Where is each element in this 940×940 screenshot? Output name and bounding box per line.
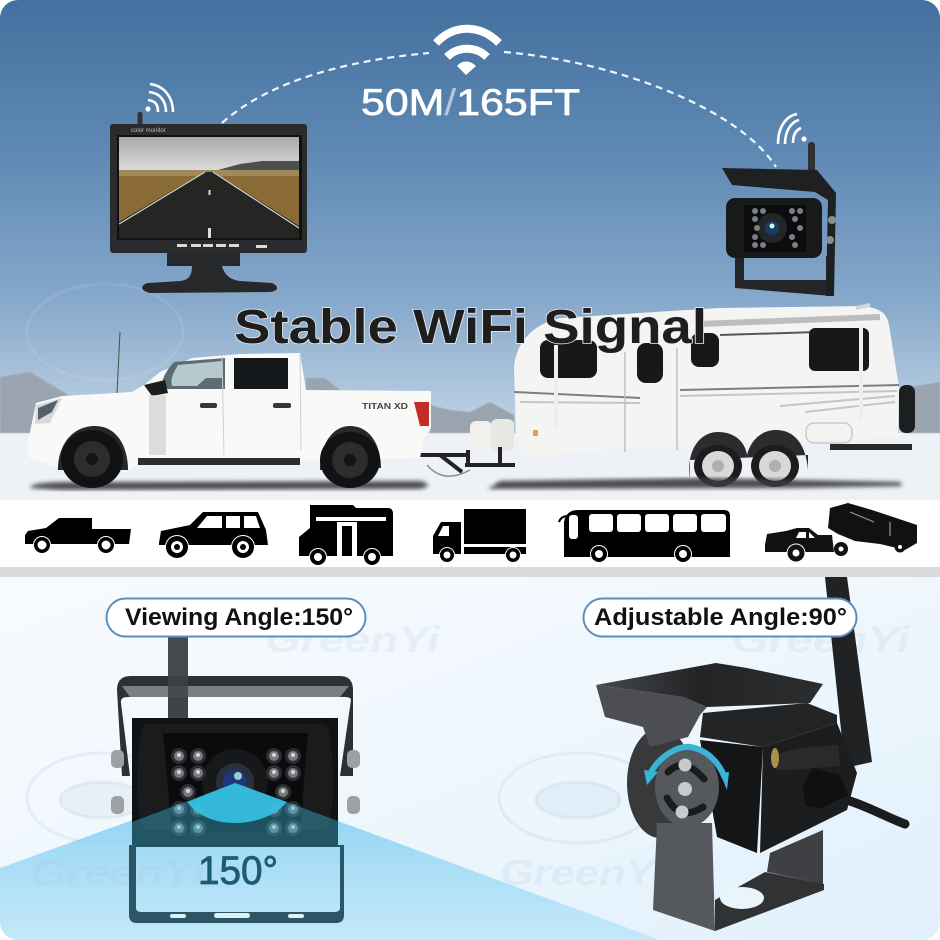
cable [815,795,905,824]
icon: motorhome [299,505,393,566]
icon: pickup [25,518,131,554]
watermark: GreenYi text: GreenYi [265,619,441,660]
ground shadows [30,478,902,490]
label: adjustable angle [584,598,856,636]
infrared LEDs [171,748,301,836]
slots and bolts [667,758,704,818]
watermark: GreenYi text: GreenYi [500,852,666,893]
pickup truck [27,332,431,488]
trailer wheels [694,445,799,487]
icon: camera signal waves [778,114,807,144]
truck wheels [61,430,380,488]
range label: 50M /165FT [361,82,580,123]
panel: lower feature section [0,577,940,940]
left camera: viewing angle [111,630,360,923]
trailer [420,303,915,487]
pickup truck: TITAN XD [362,402,408,411]
icon: SUV [159,512,268,559]
watermark: lower logos [27,753,657,843]
icon: box truck [433,509,526,563]
panel: vehicle type icon strip [0,500,940,577]
viewing cone [0,820,660,940]
watermark: GreenYi text: GreenYi [30,852,206,893]
watermark: top logos [26,282,184,349]
cone angle label: 150° [198,849,278,893]
label: adjustable angle: Adjustable Angle:90° [594,604,847,631]
camera body [132,718,338,847]
icon: rotation arrow [644,747,729,790]
panel: sky and ground scene [0,0,940,501]
watermark: GreenYi text: GreenYi [732,619,911,660]
bracket back and base [767,830,823,884]
camera back cylinder [627,734,684,838]
heading: Stable WiFi Signal [234,301,707,354]
sun visor [596,685,707,747]
viewing cone overlay on camera [132,783,338,847]
mounting plate [653,823,715,931]
camera housing [700,740,763,853]
monitor: color monitor [131,128,166,134]
bracket [129,845,344,923]
label: viewing angle [106,598,366,636]
bolts [111,750,360,814]
monitor [110,112,307,293]
icon: monitor signal waves [145,84,173,112]
rear camera with visor [722,142,836,296]
lens [202,749,268,794]
monitor screen: road photo [119,137,299,238]
antenna [825,577,872,768]
right camera: adjustable angle [596,577,905,931]
label: viewing angle: Viewing Angle:150° [125,604,353,631]
icon: bus [559,510,730,563]
watermark: GreenYi text [268,626,910,885]
icon: wifi symbol [436,29,499,75]
icon: truck with fifth wheel [765,503,917,562]
wifi range arc [222,52,776,167]
antenna connector [771,745,840,770]
hitch and tanks [420,419,515,476]
